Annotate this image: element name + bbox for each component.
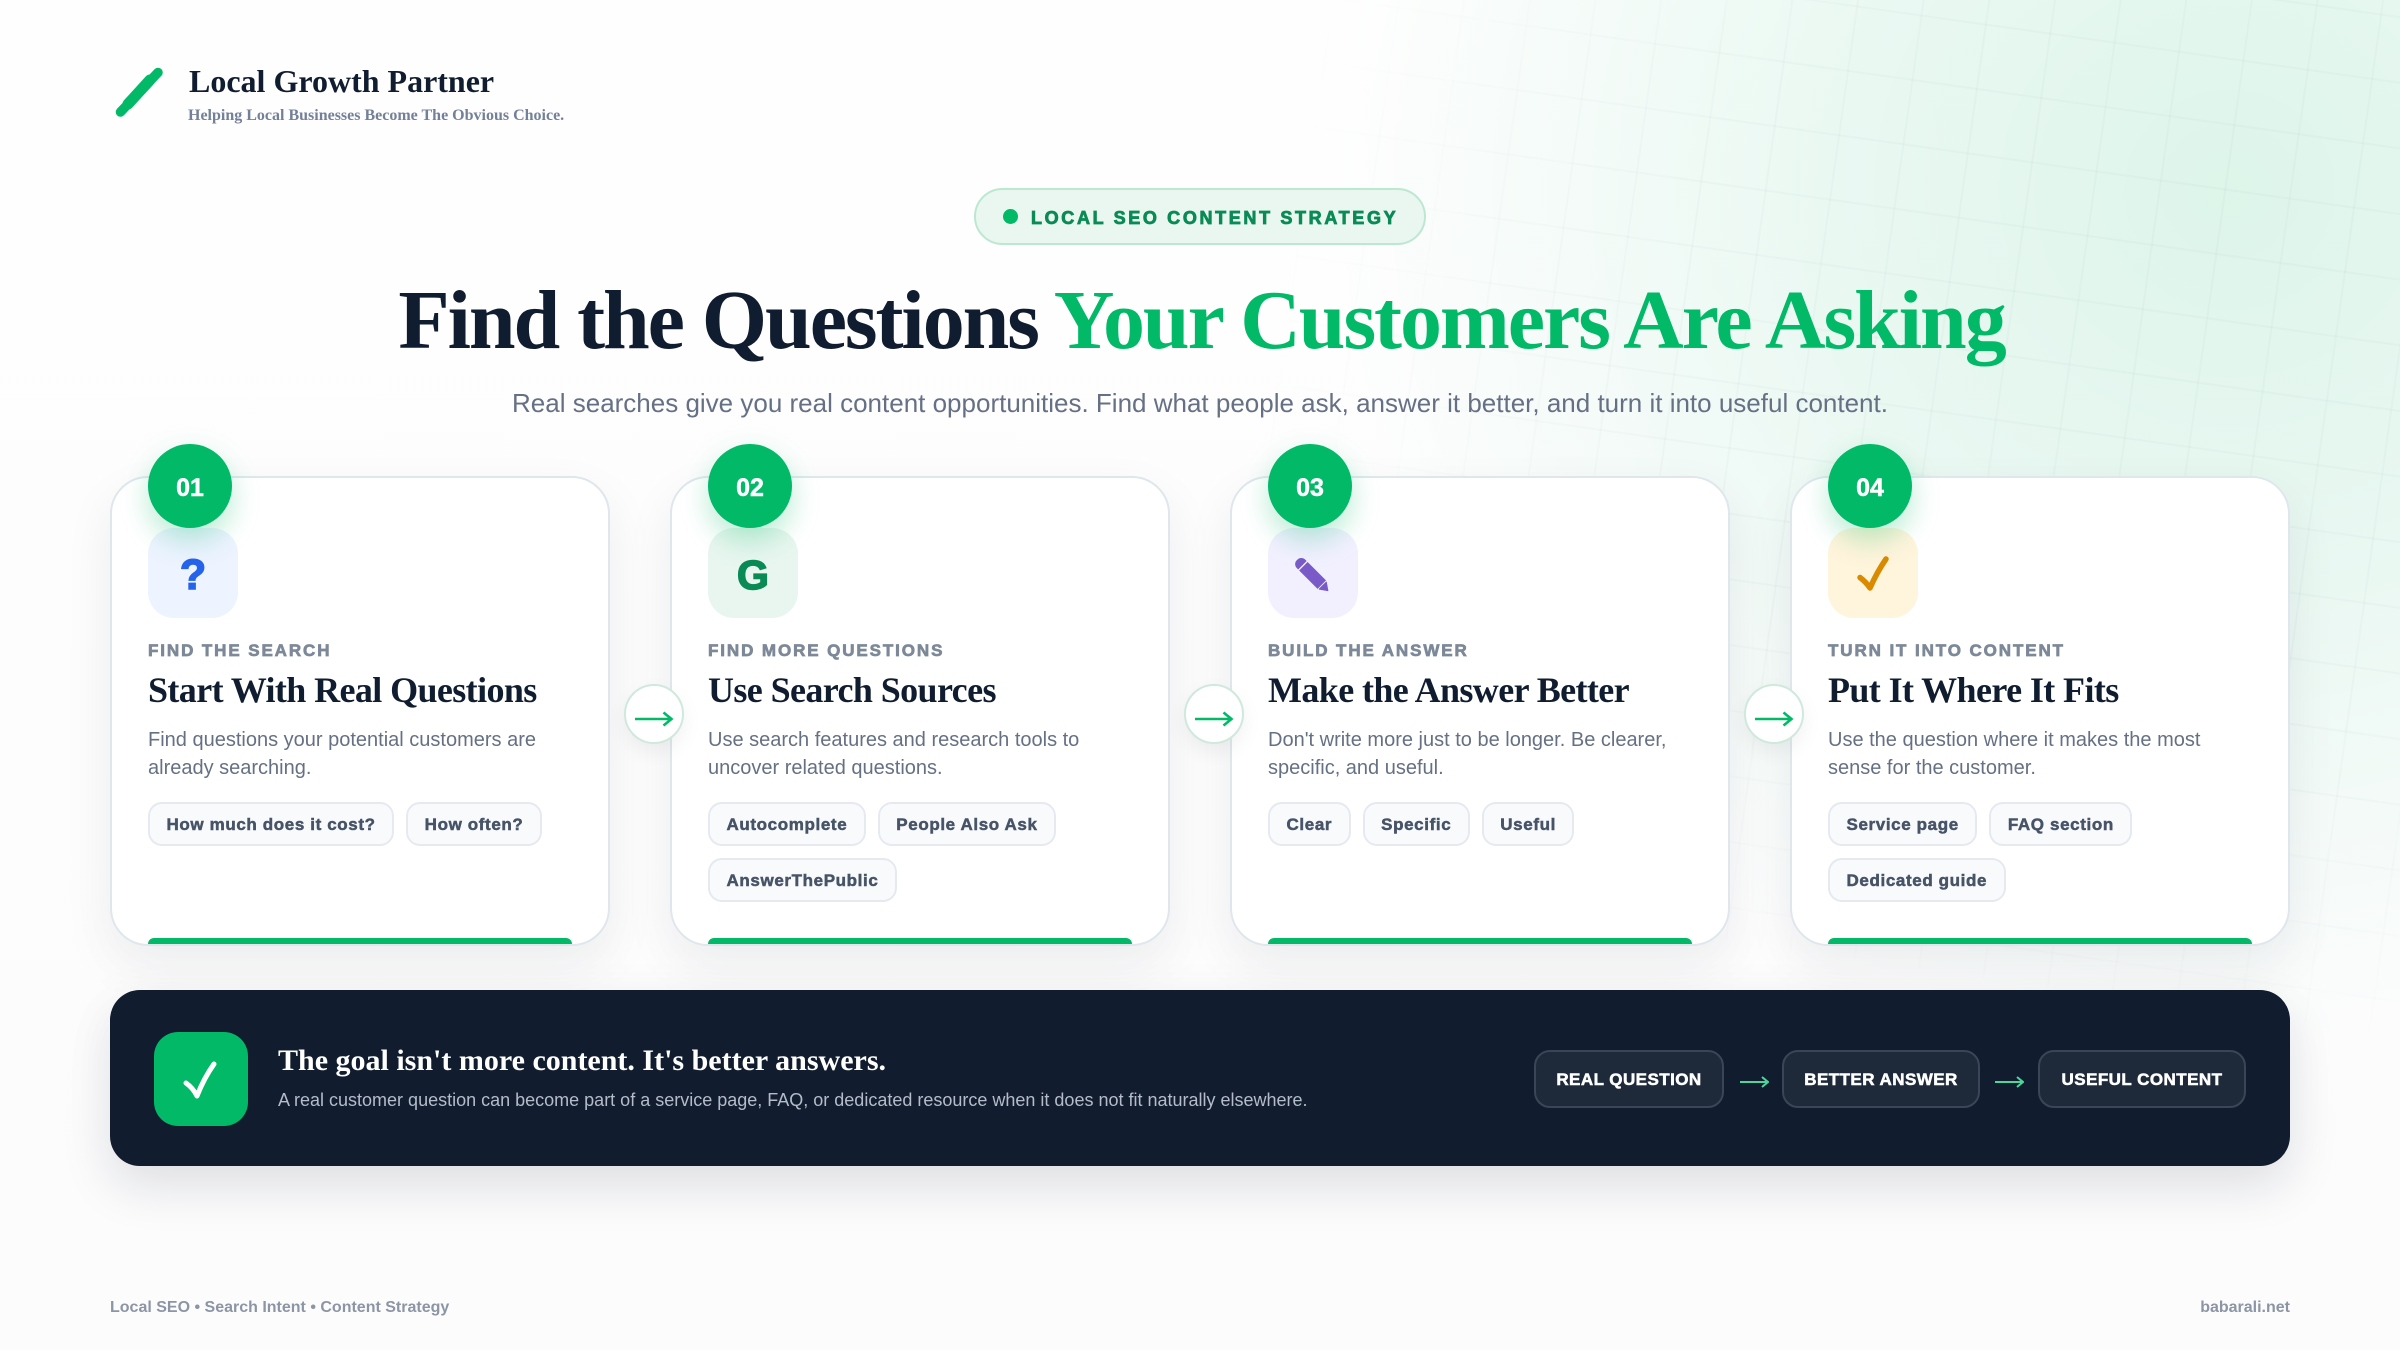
eyebrow: BUILD THE ANSWER [1268, 640, 1469, 660]
pill: better answer [1782, 1050, 1980, 1108]
brand tagline: Helping Local Businesses Become The Obvious Choice. [188, 107, 564, 124]
panel: step 01 [110, 476, 610, 946]
chips: Clear [1286, 814, 1332, 834]
step number 02 [708, 444, 792, 528]
card heading: Start With Real Questions [148, 670, 537, 710]
eyebrow: FIND MORE QUESTIONS [708, 640, 944, 660]
chips: AnswerThePublic [726, 870, 878, 890]
step number 04 [1828, 444, 1912, 528]
brand name: Local Growth Partner [189, 63, 494, 99]
card text: Find questions your potential customers are already searching. [148, 728, 536, 778]
arrow: step 1 to 2 [624, 684, 684, 744]
pill: better answer: BETTER ANSWER [1804, 1070, 1958, 1089]
card text: Use search features and research tools to uncover related questions. [708, 728, 1079, 778]
badge text: LOCAL SEO CONTENT STRATEGY [1031, 208, 1398, 228]
chips: How often? [425, 814, 523, 834]
arrow: step 2 to 3 [1184, 684, 1244, 744]
card text: Don't write more just to be longer. Be clearer, specific, and useful. [1268, 728, 1666, 778]
brand logo block [116, 63, 564, 124]
background grid [1536, 4, 2400, 797]
bottom accent bar [1268, 938, 1692, 944]
chips: FAQ section [2008, 814, 2114, 834]
bottom accent bar [708, 938, 1132, 944]
icon: check mark [1828, 528, 1918, 618]
chips [1828, 802, 2132, 902]
icon: letter G [708, 528, 798, 618]
card text: Use the question where it makes the most sense for the customer. [1828, 728, 2200, 778]
icon: pencil [1268, 528, 1358, 618]
chips: Service page [1846, 814, 1959, 834]
pill: real question: REAL QUESTION [1556, 1070, 1702, 1089]
step number 03: 03 [1296, 474, 1324, 502]
banner text: A real customer question can become part of a service page, FAQ, or dedicated resource when it does not fit naturally elsewhere. [278, 1090, 1308, 1110]
bottom accent bar [148, 938, 572, 944]
chips: Dedicated guide [1846, 870, 1987, 890]
icon: question mark: ? [180, 551, 206, 599]
subtitle: Real searches give you real content opportunities. Find what people ask, answer it better, and turn it into useful content. [512, 388, 1888, 418]
card heading: Use Search Sources [708, 670, 996, 710]
icon: white check [154, 1032, 248, 1126]
panel: step 02 [670, 476, 1170, 946]
panel: step 04 [1790, 476, 2290, 946]
chips: Useful [1500, 814, 1556, 834]
step number 01: 01 [176, 474, 204, 502]
step number 02: 02 [736, 474, 764, 502]
card heading: Put It Where It Fits [1828, 670, 2119, 710]
eyebrow: TURN IT INTO CONTENT [1828, 640, 2065, 660]
chips [148, 802, 542, 846]
eyebrow: FIND THE SEARCH [148, 640, 331, 660]
main title: Find the Questions Your Customers Are Asking [398, 274, 2005, 366]
chips: Specific [1381, 814, 1451, 834]
badge: local seo content strategy [974, 188, 1426, 245]
arrow: pill 1 to 2 [1740, 1076, 1769, 1088]
footer right: babarali.net [2200, 1298, 2290, 1316]
footer left: Local SEO • Search Intent • Content Strategy [110, 1298, 449, 1316]
step number 03 [1268, 444, 1352, 528]
banner: goal [110, 990, 2290, 1166]
pill: useful content: USEFUL CONTENT [2062, 1070, 2222, 1089]
card heading: Make the Answer Better [1268, 670, 1629, 710]
chips: Autocomplete [726, 814, 847, 834]
chips: People Also Ask [896, 814, 1038, 834]
panel: step 03 [1230, 476, 1730, 946]
step number 04: 04 [1856, 474, 1884, 502]
chips: How much does it cost? [166, 814, 376, 834]
icon: green brush stroke [116, 68, 163, 117]
bottom accent bar [1828, 938, 2252, 944]
chips [708, 802, 1056, 902]
badge dot [1003, 209, 1018, 224]
icon: question mark [148, 528, 238, 618]
chips [1268, 802, 1574, 846]
pill: real question [1534, 1050, 1724, 1108]
step number 01 [148, 444, 232, 528]
icon: letter G: G [737, 552, 769, 598]
pill: useful content [2038, 1050, 2246, 1108]
banner heading: The goal isn't more content. It's better answers. [278, 1044, 886, 1077]
arrow: pill 2 to 3 [1995, 1076, 2024, 1088]
arrow: step 3 to 4 [1744, 684, 1804, 744]
